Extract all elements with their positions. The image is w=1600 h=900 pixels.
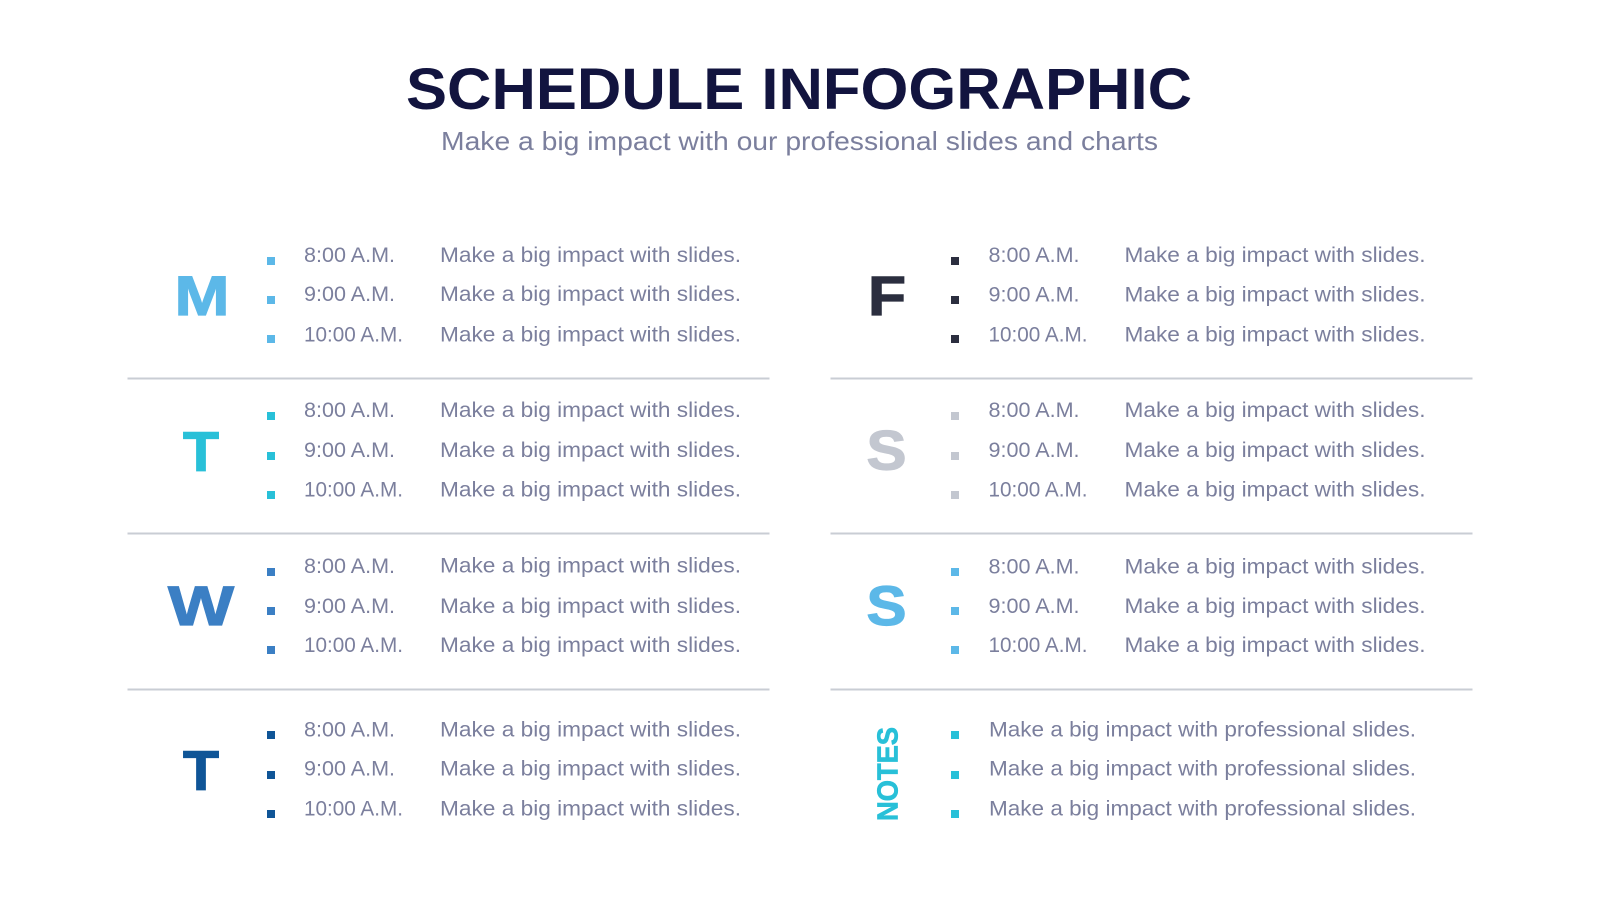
schedule rows: Make a big impact with slides. <box>440 554 741 578</box>
schedule rows <box>304 718 741 820</box>
notes rows: Make a big impact with professional slides. <box>989 718 1416 742</box>
panel: Notes <box>872 718 1416 821</box>
bullets <box>267 568 275 654</box>
vertical notes label: NOTES <box>872 727 904 821</box>
schedule rows: 10:00 A.M. <box>304 478 403 502</box>
notes rows: Make a big impact with professional slides. <box>989 758 1416 780</box>
schedule rows: Make a big impact with slides. <box>1124 399 1426 422</box>
panel: Friday <box>868 244 1426 346</box>
schedule rows: 8:00 A.M. <box>304 399 395 422</box>
schedule rows: Make a big impact with slides. <box>1124 634 1426 657</box>
schedule rows: 8:00 A.M. <box>988 244 1080 267</box>
bullets <box>951 731 959 818</box>
day letter S: S <box>866 574 906 637</box>
subtitle: Make a big impact with our professional slides and charts <box>441 126 1158 156</box>
schedule rows: 10:00 A.M. <box>304 324 403 346</box>
panel: Saturday <box>866 399 1426 502</box>
panel: Tuesday <box>183 399 741 502</box>
panel: Thursday <box>183 718 741 820</box>
schedule rows: Make a big impact with slides. <box>1124 595 1426 618</box>
schedule rows: Make a big impact with slides. <box>1124 439 1426 462</box>
schedule rows: 8:00 A.M. <box>988 399 1080 422</box>
bullets <box>267 257 275 343</box>
schedule rows <box>988 556 1426 657</box>
day letter F: F <box>868 264 906 327</box>
schedule rows: 10:00 A.M. <box>988 634 1088 657</box>
schedule rows <box>304 399 741 502</box>
schedule rows: Make a big impact with slides. <box>440 595 741 618</box>
day letter W: W <box>168 574 234 637</box>
bullets <box>951 568 959 654</box>
schedule rows: Make a big impact with slides. <box>1124 244 1426 267</box>
bullets <box>267 731 275 818</box>
day letter T: T <box>183 420 219 482</box>
bullets <box>951 412 959 499</box>
panel: Wednesday <box>168 554 741 657</box>
schedule rows <box>304 554 741 657</box>
schedule rows: 8:00 A.M. <box>988 556 1080 578</box>
notes rows <box>989 718 1416 820</box>
schedule rows: 9:00 A.M. <box>988 595 1080 618</box>
schedule rows: Make a big impact with slides. <box>440 324 741 346</box>
notes rows: Make a big impact with professional slides. <box>989 798 1416 820</box>
schedule rows: 8:00 A.M. <box>304 244 395 267</box>
schedule rows: Make a big impact with slides. <box>1124 284 1426 306</box>
schedule rows: Make a big impact with slides. <box>440 283 741 306</box>
schedule rows: Make a big impact with slides. <box>440 439 741 462</box>
schedule rows: Make a big impact with slides. <box>440 634 741 657</box>
schedule rows: 10:00 A.M. <box>988 478 1088 502</box>
day letter S: S <box>866 418 906 482</box>
schedule rows: 9:00 A.M. <box>988 439 1080 462</box>
schedule rows: 9:00 A.M. <box>304 758 395 780</box>
schedule rows: 10:00 A.M. <box>304 798 403 820</box>
schedule rows <box>988 399 1426 502</box>
schedule rows: 10:00 A.M. <box>304 634 403 657</box>
schedule rows <box>988 244 1426 346</box>
schedule rows: 8:00 A.M. <box>304 555 395 578</box>
title: SCHEDULE INFOGRAPHIC <box>406 57 1192 122</box>
schedule rows: Make a big impact with slides. <box>440 758 741 780</box>
schedule rows: Make a big impact with slides. <box>440 478 741 502</box>
schedule rows: 10:00 A.M. <box>988 324 1088 346</box>
schedule rows <box>304 244 741 346</box>
bullets <box>267 412 275 499</box>
day letter T: T <box>183 738 219 802</box>
schedule rows: 9:00 A.M. <box>988 284 1080 306</box>
day letter M: M <box>174 264 230 327</box>
schedule rows: Make a big impact with slides. <box>1124 556 1426 578</box>
bullets <box>951 257 959 343</box>
schedule rows: 9:00 A.M. <box>304 283 395 306</box>
schedule rows: 9:00 A.M. <box>304 439 395 462</box>
schedule rows: 8:00 A.M. <box>304 718 395 742</box>
panel: Monday <box>174 244 741 346</box>
panel: Sunday <box>866 556 1426 657</box>
schedule rows: Make a big impact with slides. <box>440 244 741 267</box>
schedule rows: Make a big impact with slides. <box>440 399 741 422</box>
schedule rows: Make a big impact with slides. <box>1124 324 1426 346</box>
schedule rows: 9:00 A.M. <box>304 595 395 618</box>
schedule rows: Make a big impact with slides. <box>440 718 741 742</box>
schedule rows: Make a big impact with slides. <box>1124 478 1426 502</box>
schedule rows: Make a big impact with slides. <box>440 798 741 820</box>
